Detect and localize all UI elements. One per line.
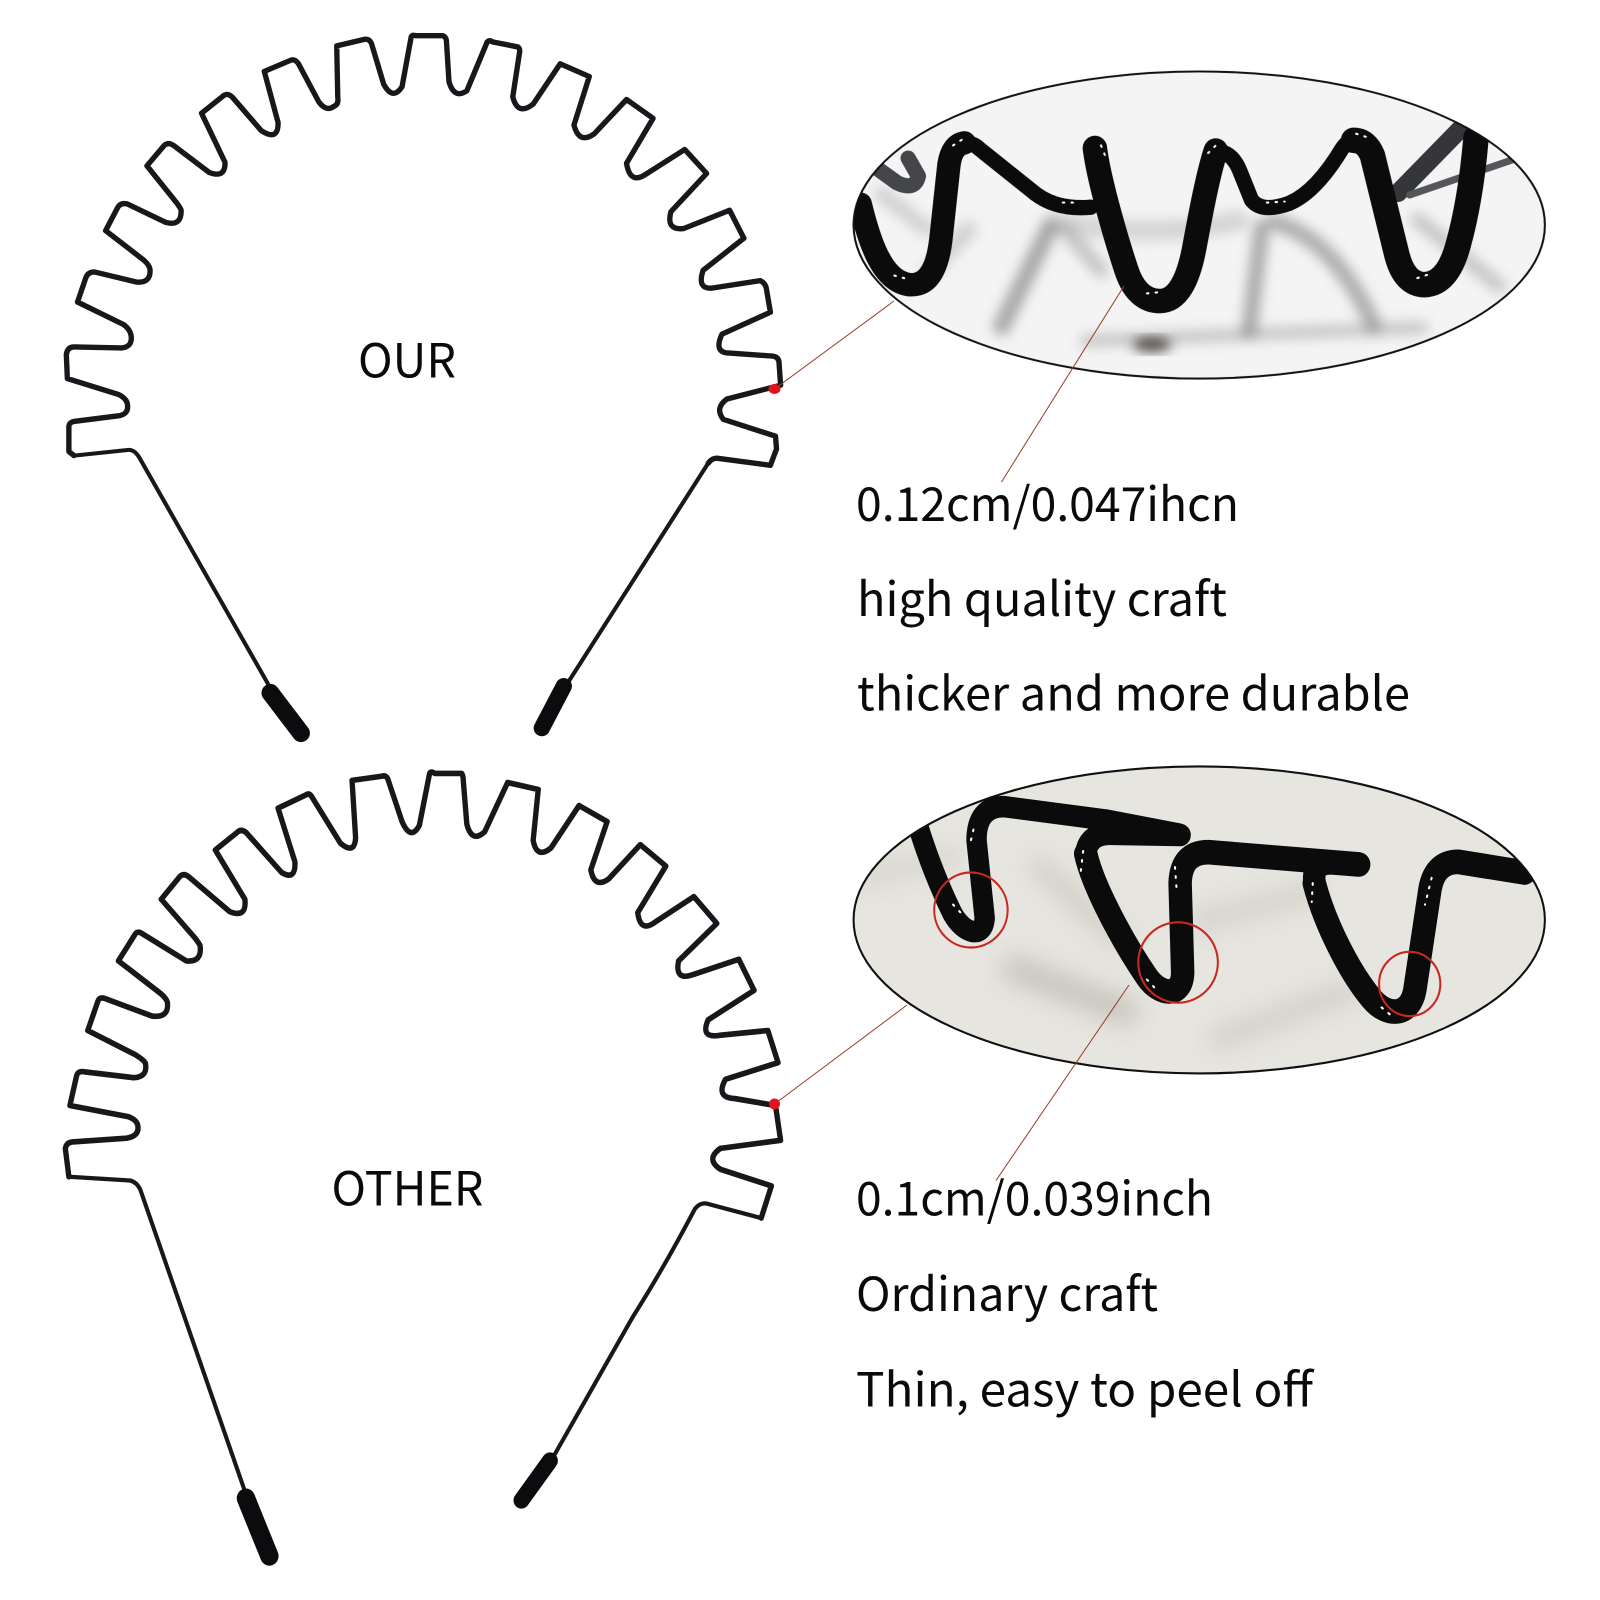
wire: first loop: [860, 139, 1091, 285]
close-up ellipse: other wire: [846, 760, 1555, 1081]
leader line: other headband to zoom ellipse: [774, 1005, 907, 1104]
text block: other headband specs: Ordinary craft: [856, 1256, 1158, 1325]
wire: second loop: [1081, 834, 1359, 991]
text block: our headband specs: 0.12cm/0.047ihcn: [856, 466, 1239, 535]
text block: other headband specs: [856, 1160, 1315, 1420]
illustration: other headband: [65, 772, 781, 1556]
marker: red dot on other headband: [769, 1098, 780, 1110]
leader line: our headband to zoom ellipse: [774, 301, 894, 389]
leader line: our close-up to text: [1002, 286, 1124, 482]
wire: first loop: [918, 807, 1179, 932]
text block: our headband specs: [856, 466, 1410, 724]
marker: red dot on our headband: [768, 384, 780, 394]
text block: other headband specs: Thin, easy to peel off: [856, 1352, 1315, 1420]
wire: third loop: [1312, 862, 1524, 1016]
text block: our headband specs: thicker and more durable: [857, 656, 1410, 724]
wire: second and third loops: [1095, 134, 1476, 301]
close-up ellipse: our wire: [846, 61, 1555, 388]
text block: other headband specs: 0.1cm/0.039inch: [856, 1160, 1213, 1230]
highlight circles: coating defects: [934, 872, 1440, 1016]
text block: our headband specs: high quality craft: [857, 561, 1227, 630]
label: OTHER: OTHER: [332, 1150, 484, 1220]
background wire pieces: [871, 129, 1524, 195]
leader line: other close-up to text: [996, 985, 1129, 1180]
label: OUR: OUR: [358, 322, 456, 392]
illustration: our headband: [66, 35, 781, 733]
